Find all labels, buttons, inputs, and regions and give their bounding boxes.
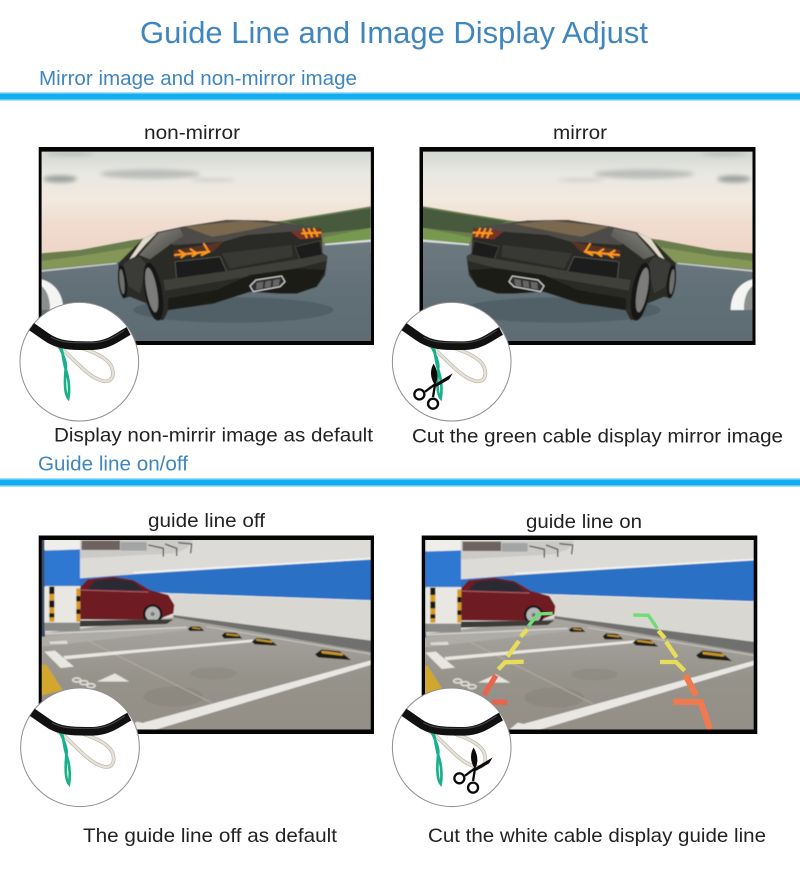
label: guide line on: guide line on	[526, 512, 642, 533]
caption: non-mirror default: Display non-mirrir image as default	[54, 424, 374, 446]
title: Guide Line and Image Display Adjust	[140, 16, 649, 50]
overlay: parking guide lines	[484, 613, 710, 729]
inset: white cable cut	[392, 688, 511, 807]
section heading: mirror image: Mirror image and non-mirror image	[39, 68, 357, 90]
screen: parking garage photo with guide lines	[416, 536, 763, 738]
caption: cut green cable: Cut the green cable display mirror image	[412, 426, 783, 448]
inset: green cable cut	[392, 302, 511, 421]
inset: intact cable loop	[20, 302, 139, 421]
section heading: guide line: Guide line on/off	[38, 454, 188, 476]
screen: parking garage photo	[35, 536, 382, 737]
screen: mirrored car photo	[414, 147, 761, 347]
label: mirror: mirror	[553, 123, 608, 144]
caption: guide line off default: The guide line off as default	[83, 825, 338, 847]
panel: mirror	[392, 123, 783, 448]
label: guide line off: guide line off	[148, 511, 266, 532]
screen: non-mirror car photo	[33, 147, 380, 347]
inset: intact cable loop	[21, 688, 139, 807]
panel: guide line on	[392, 512, 766, 847]
panel: non-mirror	[20, 123, 380, 446]
caption: cut white cable: Cut the white cable display guide line	[428, 825, 766, 847]
label: non-mirror: non-mirror	[144, 123, 241, 144]
panel: guide line off	[21, 511, 382, 847]
